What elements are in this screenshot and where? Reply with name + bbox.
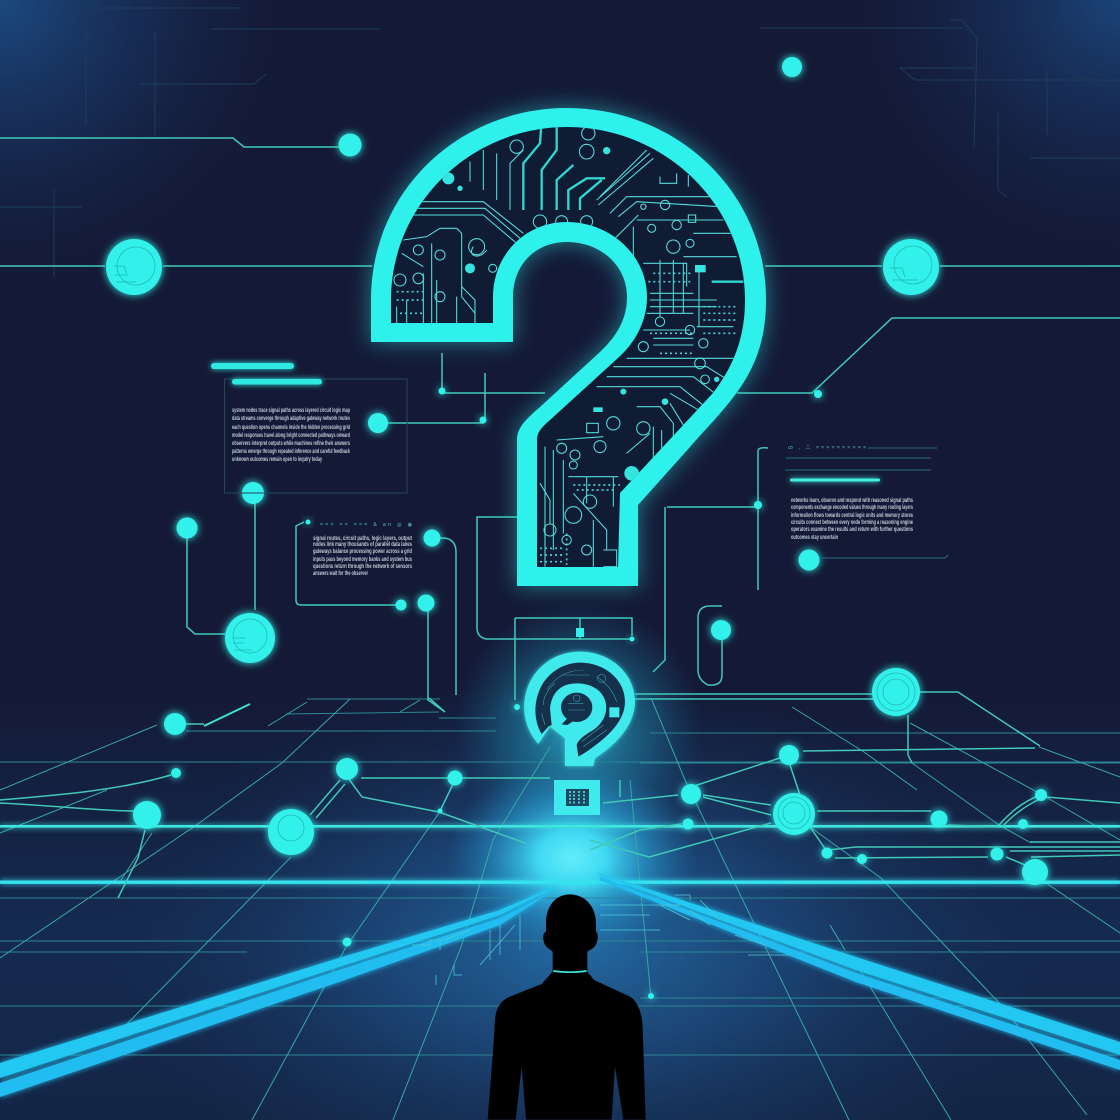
- body text: gateways balance processing power across a grid: [313, 549, 412, 555]
- panel: left text block: [211, 363, 407, 493]
- body text: answers wait for the observer: [313, 571, 368, 577]
- body text: [313, 536, 412, 577]
- node: floor right large lower: [773, 793, 815, 835]
- small question mark: [524, 652, 635, 815]
- header marks: === == === & an ◎ ◉: [320, 522, 413, 528]
- person silhouette: [488, 894, 646, 1120]
- header row: ഗ . ஃ ==========: [788, 445, 866, 451]
- body text: nodes link many thousands of parallel data lanes: [313, 542, 412, 548]
- floor grid: [0, 698, 1120, 1120]
- collar line: [553, 971, 587, 972]
- body text: networks learn, observe and respond with reasoned signal paths: [791, 498, 913, 504]
- body text: circuits connect between every node forming a reasoning engine: [791, 520, 913, 526]
- body text: questions return through the network of sensors: [313, 564, 412, 570]
- body text: operators examine the results and return with further questions: [791, 527, 913, 533]
- panel: middle text block: [313, 522, 413, 577]
- body text: patterns emerge through repeated inference and careful feedback: [232, 449, 350, 455]
- body text: observers interpret outputs while machines refine their answers: [232, 441, 350, 447]
- node: left mid large: [225, 613, 275, 663]
- body text: data streams converge through adaptive gateway network routes: [232, 416, 350, 422]
- bright horizontal line upper: [0, 825, 1120, 828]
- body text: [232, 408, 350, 463]
- floor network connections: [0, 692, 1120, 898]
- light beam left: [0, 886, 558, 1097]
- light beam right: [596, 872, 1120, 1070]
- heading bar: [790, 478, 880, 482]
- node: right large: [883, 239, 939, 295]
- body text: inputs pass beyond memory banks and system bus: [313, 557, 412, 563]
- small mark dot: [554, 780, 600, 815]
- node: floor left large: [268, 809, 314, 855]
- body text: unknown outcomes remain open to inquiry today: [232, 457, 322, 463]
- body text: system nodes trace signal paths across layered circuit logic map: [232, 408, 350, 414]
- panel: right text block: [785, 445, 948, 558]
- body text: each question opens channels inside the hidden processing grid: [232, 425, 350, 431]
- body text: model responses travel along bright connected pathways onward: [232, 433, 350, 439]
- large question mark: [371, 108, 766, 586]
- body text: signal routes, circuit paths, logic layers, output: [313, 536, 412, 542]
- body text: [791, 498, 913, 541]
- faint background circuit lines: [0, 0, 1120, 277]
- node: left large: [106, 239, 162, 295]
- floor nodes: [133, 668, 1048, 999]
- traces in small mark: [542, 670, 617, 747]
- node: floor right large upper: [872, 668, 920, 716]
- body text: information flows towards central logic units and memory stores: [791, 513, 913, 519]
- heading bars: [211, 363, 322, 384]
- body text: components exchange encoded values through many routing layers: [791, 505, 913, 511]
- connector lines upper: [0, 138, 1120, 712]
- scattered data fragments: [412, 895, 845, 985]
- node circles upper area: [106, 57, 939, 663]
- circuit traces inside question mark: [394, 120, 743, 567]
- body text: outcomes stay uncertain: [791, 535, 838, 541]
- bright horizontal line lower: [0, 880, 1120, 884]
